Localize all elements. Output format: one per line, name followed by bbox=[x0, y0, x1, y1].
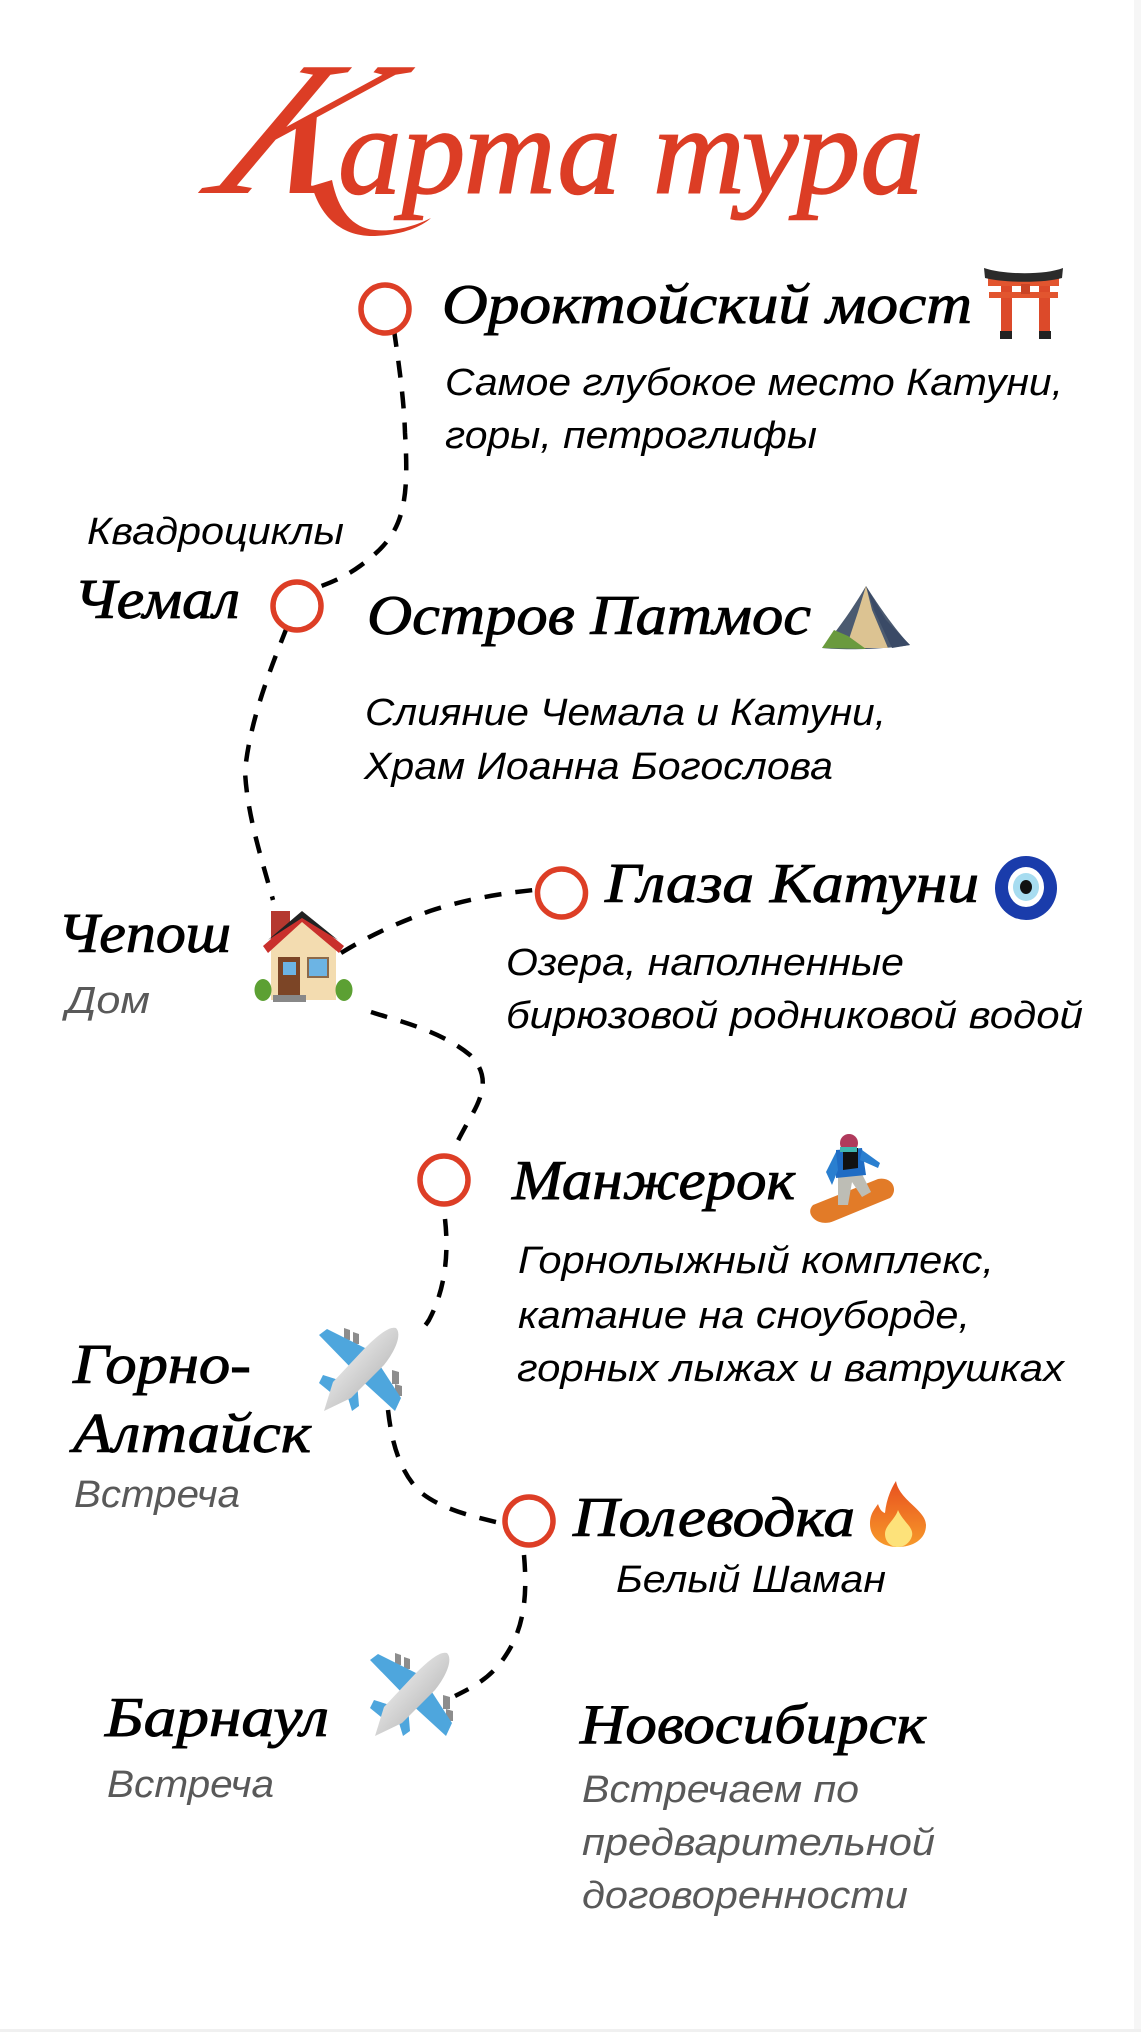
stop: Novosibirsk: Встречаем по bbox=[582, 1769, 859, 1811]
stop: Novosibirsk bbox=[579, 1694, 935, 1917]
stop: Barnaul: Барнаул bbox=[104, 1687, 329, 1749]
stop: Cheposh home bbox=[58, 903, 352, 1022]
stop: Oroktoisky bridge: Самое глубокое место Катуни, bbox=[445, 362, 1063, 404]
stop: Patmos island: Слияние Чемала и Катуни, bbox=[365, 692, 886, 734]
icon: fire bbox=[870, 1481, 926, 1547]
stop: Manzherok: Манжерок bbox=[511, 1150, 796, 1212]
stop: Barnaul: Встреча bbox=[107, 1764, 274, 1806]
stop: Chemal: Квадроциклы bbox=[87, 511, 344, 553]
route: dashed path bbox=[245, 330, 534, 1696]
stop: Patmos island: Остров Патмос bbox=[367, 585, 811, 647]
icon: airplane bbox=[319, 1328, 402, 1411]
stop: Katun Eyes: Озера, наполненные bbox=[506, 942, 904, 984]
stop: Novosibirsk: предварительной bbox=[582, 1822, 935, 1864]
stop: Katun Eyes bbox=[506, 853, 1083, 1037]
stop: Polevodka bbox=[572, 1481, 926, 1601]
icon: mountain bbox=[822, 586, 910, 649]
stop: Oroktoisky bridge bbox=[442, 268, 1063, 457]
stop marker: Patmos bbox=[273, 582, 321, 630]
stop: Gorno-Altaysk: Встреча bbox=[74, 1474, 240, 1516]
stop: Katun Eyes: Глаза Катуни bbox=[604, 853, 979, 915]
stop: Chemal bbox=[74, 511, 344, 631]
stop: Patmos island: Храм Иоанна Богослова bbox=[363, 746, 833, 788]
stop: Manzherok bbox=[511, 1134, 1066, 1390]
stop: Oroktoisky bridge: горы, петроглифы bbox=[445, 415, 817, 457]
title bbox=[169, 23, 924, 236]
stop marker: Polevodka bbox=[505, 1497, 553, 1545]
stop marker: Manzherok bbox=[420, 1156, 468, 1204]
icon: house bbox=[254, 911, 352, 1002]
stop: Polevodka: Белый Шаман bbox=[616, 1559, 886, 1601]
icon: evil eye bbox=[995, 856, 1057, 920]
stop: Polevodka: Полеводка bbox=[572, 1487, 855, 1549]
icon: airplane bbox=[370, 1653, 453, 1736]
stop marker: Katun Eyes bbox=[538, 869, 586, 917]
stop: Gorno-Altaysk: Горно- bbox=[72, 1334, 251, 1396]
stop: Gorno-Altaysk: Алтайск bbox=[68, 1403, 312, 1465]
stop: Gorno-Altaysk bbox=[68, 1328, 402, 1516]
stop: Oroktoisky bridge: Ороктойский мост bbox=[442, 274, 972, 336]
stop marker: Oroktoisky bridge bbox=[361, 285, 409, 333]
icon: snowboarder bbox=[810, 1134, 894, 1223]
stop: Chemal: Чемал bbox=[74, 569, 240, 631]
stop: Patmos island bbox=[363, 585, 910, 788]
stop: Cheposh home: Чепош bbox=[58, 903, 231, 965]
stop: Cheposh home: Дом bbox=[61, 980, 150, 1022]
title: арта тура bbox=[338, 83, 924, 221]
stop: Novosibirsk: договоренности bbox=[582, 1875, 908, 1917]
stop: Barnaul bbox=[104, 1653, 453, 1806]
icon: torii gate bbox=[984, 268, 1063, 339]
stop: Manzherok: Горнолыжный комплекс, bbox=[518, 1240, 994, 1282]
stop: Manzherok: катание на сноуборде, bbox=[518, 1295, 970, 1337]
stop: Katun Eyes: бирюзовой родниковой водой bbox=[506, 995, 1083, 1037]
stop: Manzherok: горных лыжах и ватрушках bbox=[517, 1348, 1066, 1390]
title: К bbox=[169, 23, 446, 235]
stop: Novosibirsk: Новосибирск bbox=[579, 1694, 927, 1756]
